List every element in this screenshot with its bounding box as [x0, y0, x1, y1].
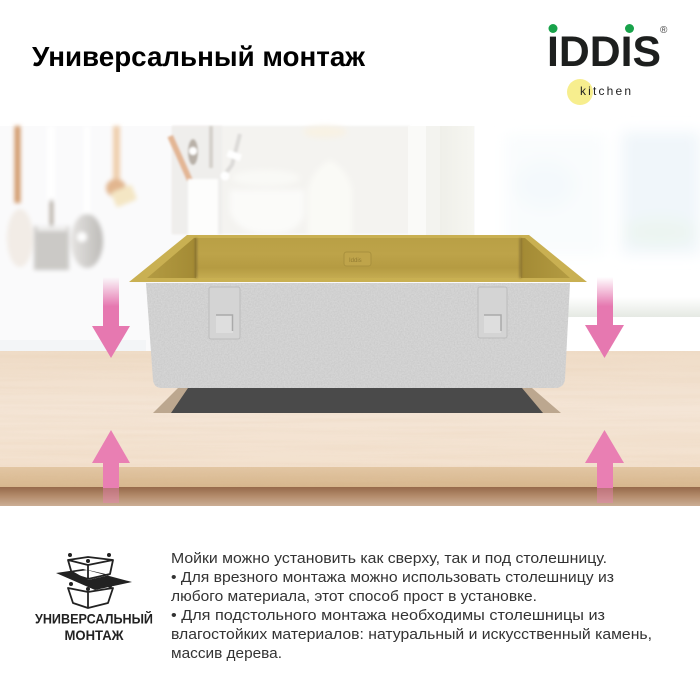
- blurred utensil jar and cutlery: [167, 126, 242, 236]
- arrow: right up: [585, 430, 624, 503]
- arrow: right down: [585, 277, 624, 358]
- blurred hanging utensils: [7, 126, 137, 270]
- sink rim: [129, 235, 587, 282]
- logo wordmark: IDDIS: [547, 28, 661, 76]
- icon caption: [35, 612, 153, 643]
- blurred bowls and jug: [230, 126, 352, 236]
- icon arrow dots: [68, 553, 112, 591]
- arrow: left down: [92, 277, 130, 358]
- icon countertop slab: [56, 569, 132, 590]
- left mounting clip: [209, 287, 240, 339]
- photo background wall: [0, 126, 700, 352]
- logo kitchen text: kitchen: [580, 84, 631, 98]
- description text: Мойки можно установить как сверху, так и под столешницу.: [171, 551, 607, 567]
- right mounting clip: [478, 287, 507, 338]
- sink back wall: [196, 238, 521, 278]
- description text: [171, 551, 652, 662]
- sink corner shadows: [195, 238, 522, 278]
- cut-out tan edge: [153, 388, 561, 413]
- title: Универсальный монтаж: [32, 41, 365, 72]
- sink left wall: [147, 238, 196, 278]
- description text: влагостойких материалов: натуральный и искусственный камень,: [171, 627, 652, 643]
- icon caption: МОНТАЖ: [64, 628, 124, 643]
- logo: IDDIS kitchen: [547, 24, 668, 105]
- wood counter top: [0, 351, 700, 468]
- sink right wall: [521, 238, 570, 278]
- sink logo plate: Iddis: [349, 258, 362, 264]
- sink body: [146, 283, 570, 388]
- icon: universal mounting: [56, 553, 132, 608]
- description text: • Для врезного монтажа можно использовать столешницу из: [171, 570, 614, 586]
- icon upper sink: [68, 557, 113, 579]
- arrow: left up: [92, 430, 130, 503]
- cut-out dark opening: [171, 388, 543, 413]
- window sill band: [568, 297, 700, 351]
- kitchen photo: [0, 126, 700, 506]
- description text: любого материала, этот способ прост в установке.: [171, 589, 537, 605]
- logo green dots: [548, 24, 634, 33]
- blurred window: [505, 132, 700, 255]
- counter front edge: [0, 467, 700, 488]
- blurred back wall and shelf: [172, 126, 474, 236]
- sink: [129, 235, 587, 388]
- logo registered mark: ®: [660, 25, 668, 36]
- sink logo plate: [344, 252, 371, 266]
- description text: • Для подстольного монтажа необходимы столешницы из: [171, 608, 605, 624]
- icon lower sink: [68, 588, 113, 608]
- description text: массив дерева.: [171, 646, 282, 662]
- icon caption: УНИВЕРСАЛЬНЫЙ: [35, 612, 153, 626]
- logo yellow circle: [567, 79, 593, 105]
- counter underside: [0, 487, 700, 506]
